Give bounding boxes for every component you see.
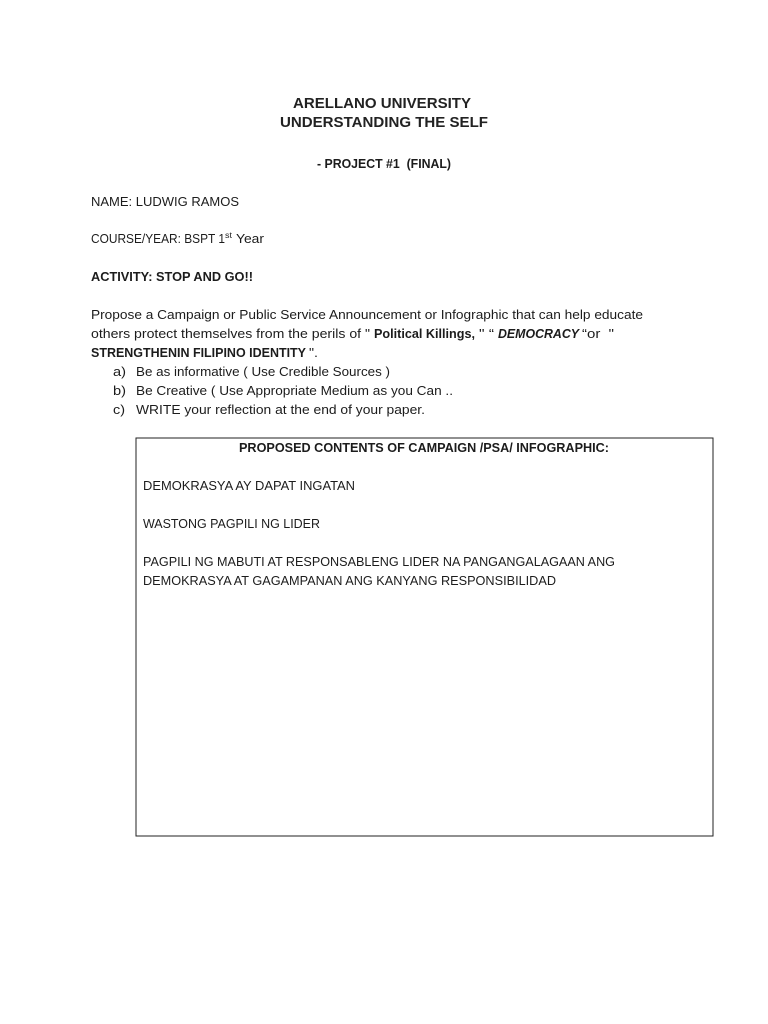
list: requirements xyxy=(113,364,453,417)
text block: instructions: " “ xyxy=(479,326,494,341)
heading: activity: ACTIVITY: STOP AND GO!! xyxy=(91,269,253,284)
text block: course and year: Year xyxy=(236,231,265,246)
text block: instructions: “or " xyxy=(582,326,614,341)
list: requirements: a) xyxy=(113,364,126,379)
text block: instructions: Political Killings, xyxy=(374,326,475,341)
list: requirements: c) xyxy=(113,402,125,417)
text: democracy line: DEMOKRASYA AY DAPAT INGATAN xyxy=(143,478,355,493)
text block: course and year: st xyxy=(225,231,233,240)
text block: instructions: others protect themselves from the perils of " xyxy=(91,326,370,341)
list: requirements: WRITE your reflection at the end of your paper. xyxy=(136,402,425,417)
list: requirements: Be Creative ( Use Appropriate Medium as you Can .. xyxy=(136,383,453,398)
text block: name: NAME: LUDWIG RAMOS xyxy=(91,194,239,209)
text block: instructions xyxy=(91,307,643,360)
heading: project: - PROJECT #1 (FINAL) xyxy=(317,156,451,171)
text block: instructions: DEMOCRACY xyxy=(498,326,580,341)
panel: proposed contents box xyxy=(136,438,713,836)
text: responsible leader paragraph: DEMOKRASYA AT GAGAMPANAN ANG KANYANG RESPONSIBILIDAD xyxy=(143,573,556,588)
text block: course and year: COURSE/YEAR: BSPT 1 xyxy=(91,231,225,246)
text block: instructions: ". xyxy=(309,345,318,360)
title: university and course xyxy=(280,96,488,131)
title: university and course: UNDERSTANDING THE SELF xyxy=(280,115,488,131)
text block: instructions: Propose a Campaign or Public Service Announcement or Infographic that can help educate xyxy=(91,307,643,322)
list: requirements: b) xyxy=(113,383,126,398)
text: responsible leader paragraph: PAGPILI NG MABUTI AT RESPONSABLENG LIDER NA PANGANGALAGAAN ANG xyxy=(143,554,615,569)
text block: instructions: STRENGTHENIN FILIPINO IDENTITY xyxy=(91,345,306,360)
title: university and course: ARELLANO UNIVERSITY xyxy=(293,96,471,112)
text: responsible leader paragraph xyxy=(143,554,615,588)
text: leader line: WASTONG PAGPILI NG LIDER xyxy=(143,516,320,531)
list: requirements: Be as informative ( Use Credible Sources ) xyxy=(136,364,390,379)
heading: proposed contents: PROPOSED CONTENTS OF CAMPAIGN /PSA/ INFOGRAPHIC: xyxy=(239,440,609,455)
